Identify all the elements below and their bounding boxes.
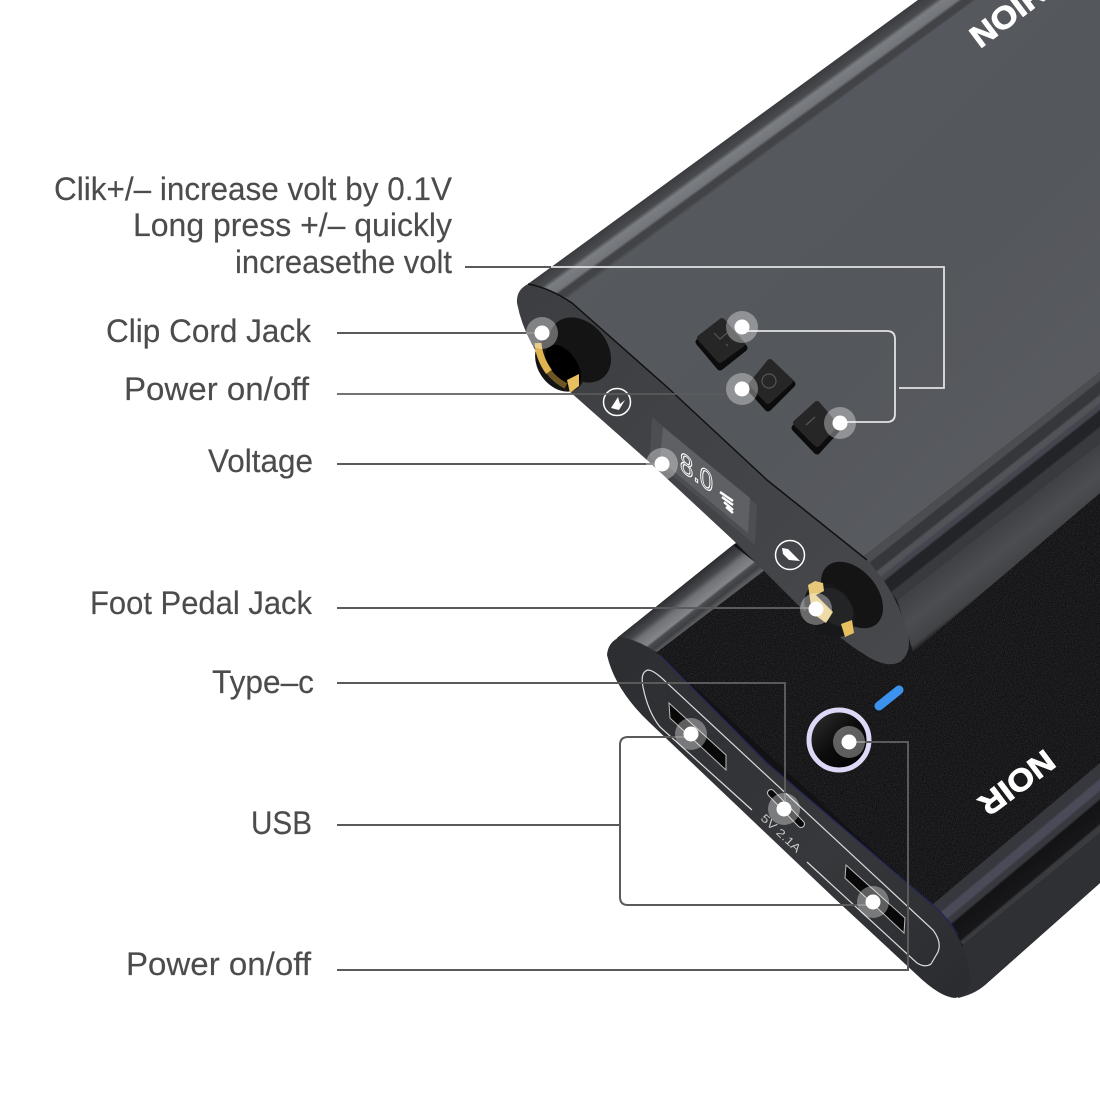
dot: type-c xyxy=(768,793,800,825)
lower device top surface xyxy=(657,480,1100,905)
callout text: clik adjust: Clik+/– increase volt by 0.1V xyxy=(54,171,453,207)
USB port left xyxy=(669,703,726,770)
clip cord jack xyxy=(525,305,624,401)
signal bars xyxy=(720,492,733,513)
right edge strip xyxy=(932,763,1100,945)
voltage display xyxy=(650,417,757,545)
right edge strip xyxy=(863,372,1100,600)
lower device xyxy=(607,372,1100,998)
dot: USB left xyxy=(675,718,707,750)
callout text: clik adjust: increasethe volt xyxy=(235,244,452,280)
status LED xyxy=(879,690,899,706)
surface grain xyxy=(650,480,1100,910)
upper side wall xyxy=(897,443,1100,652)
label: USB: USB xyxy=(251,805,312,841)
dot: foot pedal jack xyxy=(800,593,832,625)
upper device top surface xyxy=(528,0,1100,557)
dot: clip cord jack xyxy=(526,317,558,349)
dot: power button lower xyxy=(833,726,865,758)
lower side wall xyxy=(958,833,1100,998)
lower device body xyxy=(617,300,1100,997)
label: voltage: Voltage xyxy=(208,443,313,479)
label: foot pedal jack: Foot Pedal Jack xyxy=(90,585,313,621)
left edge strip xyxy=(528,0,975,298)
callout text: clik adjust: Long press +/– quickly xyxy=(133,207,452,243)
callout text: clik adjust xyxy=(54,171,453,280)
dot: minus button xyxy=(824,407,856,439)
foot pedal jack xyxy=(794,550,896,647)
leader lines xyxy=(337,267,944,970)
upper device xyxy=(517,0,1100,664)
power button xyxy=(809,710,869,770)
button plus xyxy=(699,321,744,367)
lower device front face xyxy=(607,637,970,998)
dot: USB right xyxy=(857,886,889,918)
foot pedal icon xyxy=(776,540,804,570)
button minus xyxy=(795,404,836,451)
blue edge highlight xyxy=(660,655,958,935)
left edge strip xyxy=(617,545,765,652)
port rating text: 5V 2.1A xyxy=(758,812,803,856)
dot: voltage xyxy=(646,448,678,480)
button power xyxy=(751,362,792,408)
dot: plus button xyxy=(726,311,758,343)
label: power on/off top: Power on/off xyxy=(124,371,309,407)
port bezel outline xyxy=(642,670,939,966)
marker dots xyxy=(526,311,889,918)
Type-C port xyxy=(771,793,801,824)
NOIR logo lower: NOIR xyxy=(972,743,1062,822)
label: type-c: Type–c xyxy=(212,664,314,700)
upper device front face xyxy=(517,284,909,664)
label: power on/off bottom: Power on/off xyxy=(126,946,311,982)
front top edge shadow xyxy=(528,284,867,560)
voltage reading: 8.0 xyxy=(680,445,713,500)
USB port right xyxy=(845,865,905,933)
clip cord icon xyxy=(604,388,630,416)
label: clip cord jack: Clip Cord Jack xyxy=(106,313,312,349)
dot: power button xyxy=(726,373,758,405)
